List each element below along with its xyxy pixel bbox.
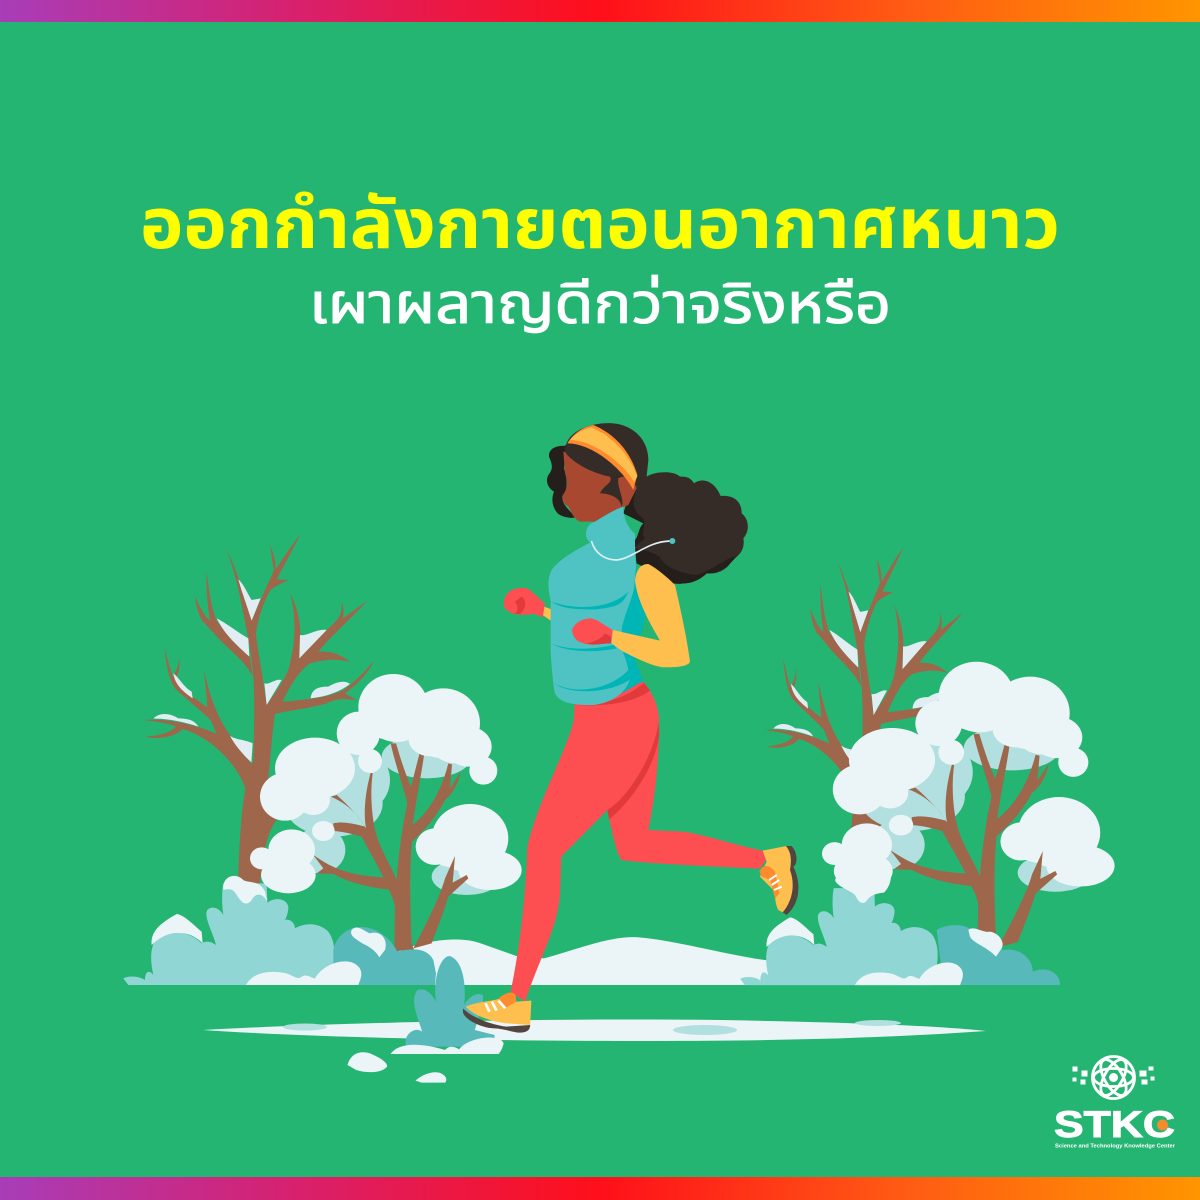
light bush right <box>740 888 938 985</box>
face <box>562 452 637 522</box>
subtitle: เผาผลาญดีกว่าจริงหรือ <box>309 272 891 335</box>
snow on dark bush left <box>351 927 386 957</box>
near arm <box>612 564 690 667</box>
front shoe <box>463 993 531 1033</box>
snowy path <box>203 1019 986 1041</box>
snow hills <box>370 937 777 985</box>
logo STKC <box>1054 1056 1176 1150</box>
upper body <box>504 423 748 705</box>
right scene: bare tree, snowy tree and bushes <box>740 547 1115 985</box>
logo wordmark: STKC <box>1054 1104 1175 1145</box>
top gradient bar <box>0 0 1200 22</box>
near glove <box>572 618 613 645</box>
bush snow base left <box>246 961 361 985</box>
logo orange dot <box>1157 1120 1168 1130</box>
vest <box>622 567 647 693</box>
dark bush right <box>937 925 1060 985</box>
snowy tree right <box>822 662 1115 950</box>
runner <box>463 423 798 1033</box>
bare tree left <box>144 534 374 883</box>
vest stripes <box>552 592 630 691</box>
logo caption: Science and Technology Knowledge Center <box>1055 1144 1176 1150</box>
logo atom icon <box>1072 1056 1154 1099</box>
snowy tree left <box>250 674 522 951</box>
legs <box>511 682 798 1002</box>
hair <box>566 423 748 584</box>
left scene: bare tree, snowy tree and bushes <box>123 534 522 985</box>
earphone <box>592 538 675 560</box>
title: ออกกำลังกายตอนอากาศหนาว <box>140 185 1060 263</box>
headband <box>567 425 637 490</box>
back shoe <box>759 846 798 915</box>
bottom gradient bar <box>0 1177 1200 1200</box>
ground: path, puddles, stones and foreground shrub <box>203 956 986 1083</box>
puddles <box>283 1020 901 1035</box>
snow drip on right bush <box>835 870 891 903</box>
hair fringe <box>565 445 637 507</box>
bush snow cap left <box>152 876 267 945</box>
bush snow base right <box>855 963 963 985</box>
light bush left <box>123 883 334 985</box>
far glove <box>504 588 545 617</box>
dark bush left <box>333 927 436 985</box>
far arm <box>543 607 552 621</box>
bare tree right <box>765 547 969 891</box>
foreground shrub and stones <box>347 956 504 1083</box>
